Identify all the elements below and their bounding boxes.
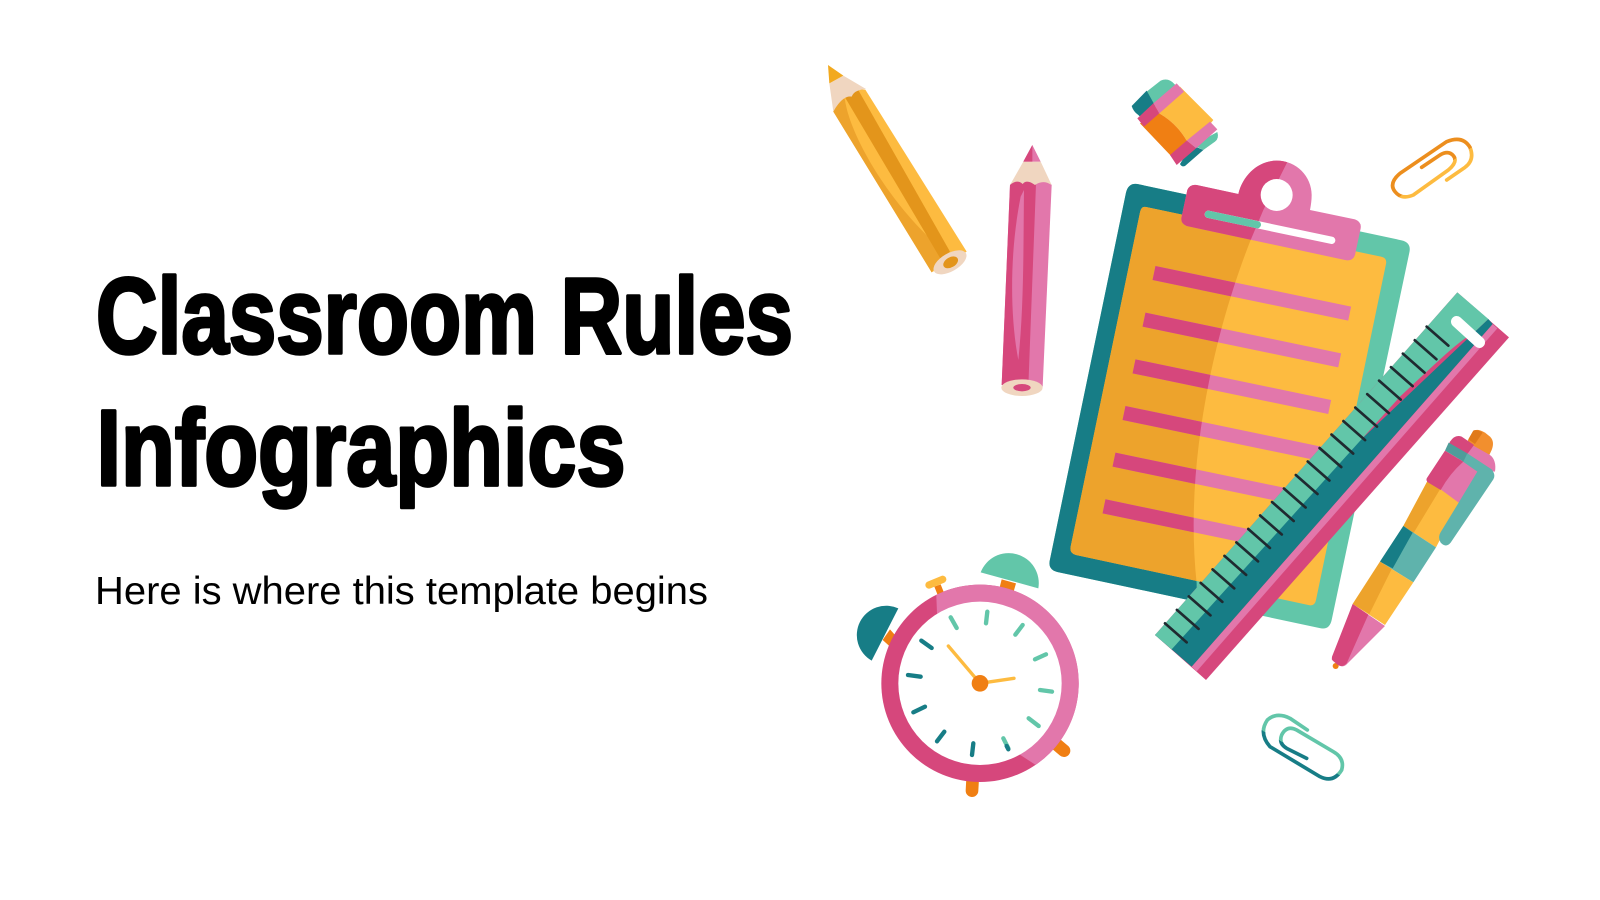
icon: pen [1332,430,1495,669]
icon: teal paperclip [1263,715,1342,779]
paper text lines [1104,273,1350,547]
title: Classroom Rules [96,255,793,376]
icon: clipboard [1049,161,1410,629]
pen band shadow [1445,443,1467,462]
clock hands [948,646,1014,692]
clipboard paper [1070,207,1386,605]
slide canvas [98,65,1509,797]
clock bells and feet [857,553,1064,791]
clock ring [881,585,1079,782]
pen grip [1441,458,1477,503]
icon: ruler [1155,292,1509,680]
icon: eraser [1132,80,1218,166]
clipboard board [1049,184,1410,629]
pen clip arm [1439,453,1494,545]
pen button [1467,430,1493,455]
pen tip [1333,663,1339,669]
icon: yellow pencil [828,65,970,279]
pen cap [1462,440,1495,472]
clock tick marks [908,612,1052,755]
subtitle: Here is where this template begins [95,570,708,613]
title: Infographics [96,387,626,508]
pen barrel [1403,480,1461,547]
ruler tick marks [1165,327,1448,642]
title [96,255,793,508]
clipboard clip [1181,161,1361,260]
icon: alarm clock [857,553,1079,791]
icon: orange paperclip [1393,139,1472,197]
icon: pink pencil [1001,145,1052,396]
